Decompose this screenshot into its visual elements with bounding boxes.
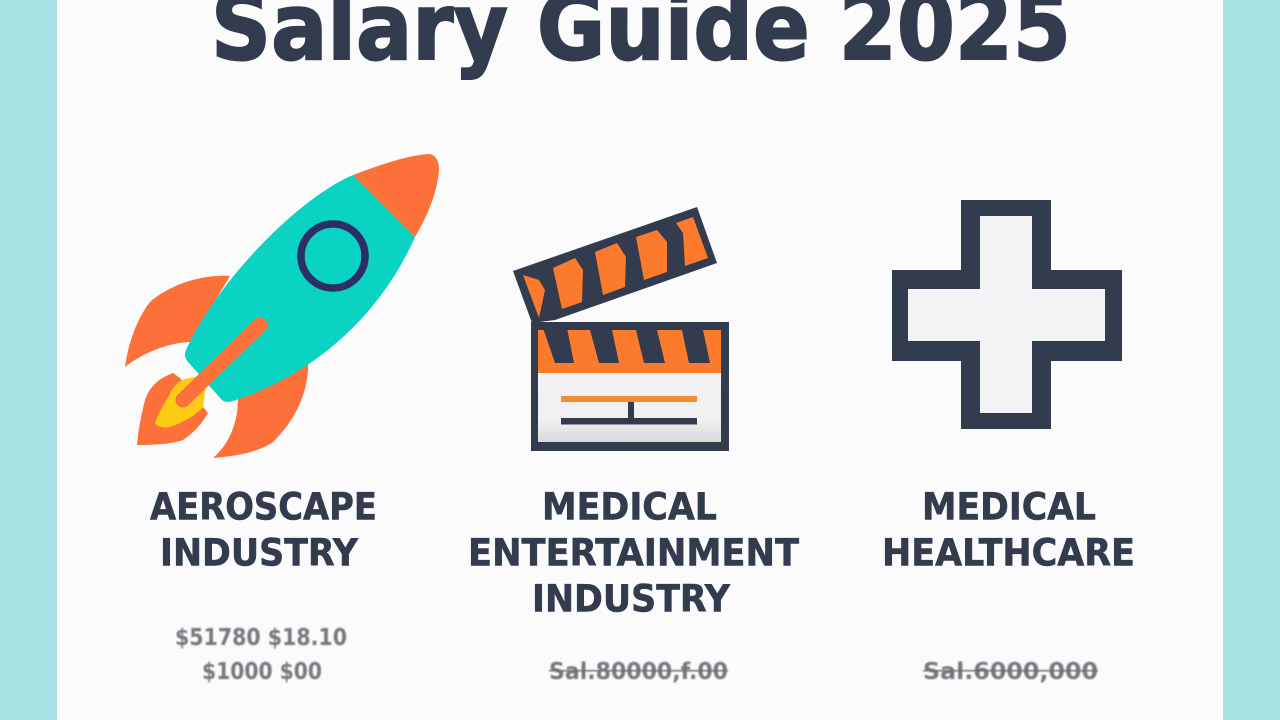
label: medical entertainment industry: MEDICAL: [542, 486, 717, 528]
label: medical healthcare: MEDICAL: [922, 486, 1096, 528]
label: medical entertainment industry: [468, 486, 800, 620]
label: medical healthcare: [882, 486, 1135, 574]
icon: clapperboard: [513, 207, 729, 451]
label: medical healthcare: HEALTHCARE: [882, 532, 1135, 574]
label: medical entertainment industry: INDUSTRY: [532, 578, 731, 620]
label: aerospace industry: INDUSTRY: [160, 532, 359, 574]
salary: entertainment: Sal.80000,f.00: [549, 659, 728, 685]
icon: rocket: [125, 154, 439, 458]
salary: aerospace: $51780 $18.10: [175, 625, 347, 651]
salary: healthcare: Sal.6000,000: [923, 659, 1098, 685]
salary: aerospace: $1000 $00: [202, 659, 322, 685]
icon: medical cross: [892, 200, 1122, 429]
salary: aerospace: [175, 625, 347, 685]
label: aerospace industry: [150, 486, 377, 574]
label: aerospace industry: AEROSCAPE: [150, 486, 377, 528]
label: medical entertainment industry: ENTERTAINMENT: [468, 532, 800, 574]
